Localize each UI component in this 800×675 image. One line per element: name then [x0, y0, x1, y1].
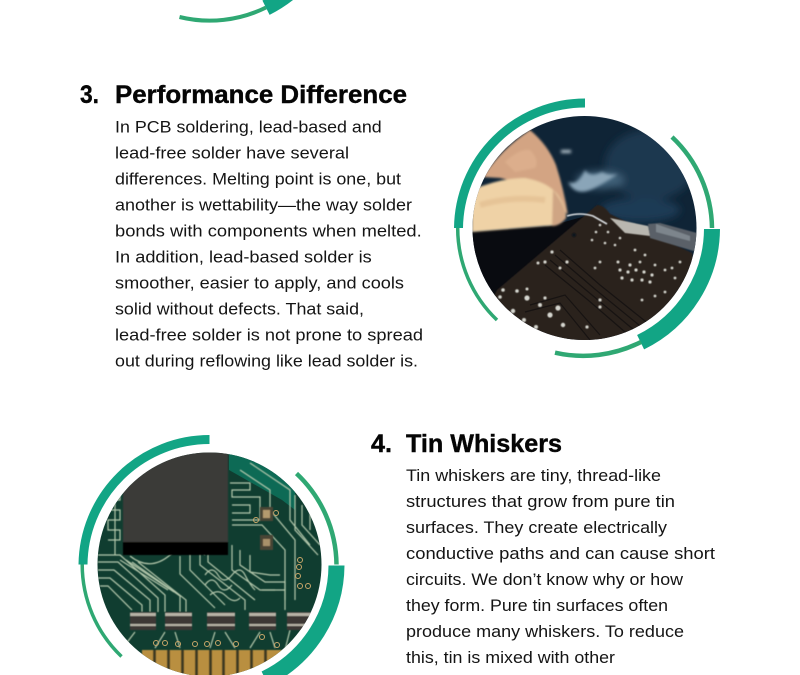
photo: hand soldering a circuit board [470, 115, 705, 345]
heading: 3. Performance Difference: Performance Difference [115, 81, 407, 109]
text block: performance difference: In PCB soldering, lead-based and [115, 118, 382, 136]
heading: 4. Tin Whiskers: Tin Whiskers [406, 430, 562, 458]
photo: circuit board with chip [95, 450, 325, 675]
text block: tin whiskers: Tin whiskers are tiny, thread-like [406, 466, 661, 485]
text block: tin whiskers: produce many whiskers. To reduce [406, 622, 684, 641]
ring around photo 3 [458, 103, 712, 356]
text block: tin whiskers: conductive paths and can cause short [406, 544, 715, 563]
text block: tin whiskers: circuits. We don’t know why or how [406, 570, 684, 589]
decorative ring from previous section [180, 0, 336, 21]
text block: performance difference: another is wettability—the way solder [115, 196, 412, 214]
ring around photo 4 [82, 440, 336, 675]
text block: performance difference: In addition, lead-based solder is [115, 248, 372, 266]
text block: performance difference: smoother, easier to apply, and cools [115, 274, 404, 292]
text block: performance difference: lead-free solder is not prone to spread [115, 326, 423, 344]
text block: tin whiskers [406, 466, 715, 667]
text block: tin whiskers: they form. Pure tin surfaces often [406, 596, 668, 615]
text block: performance difference: differences. Melting point is one, but [115, 170, 401, 188]
text block: performance difference: lead-free solder have several [115, 144, 349, 162]
text block: performance difference: solid without defects. That said, [115, 300, 364, 318]
text block: performance difference: bonds with components when melted. [115, 222, 422, 240]
text block: tin whiskers: this, tin is mixed with other [406, 648, 615, 667]
text block: tin whiskers: surfaces. They create electrically [406, 518, 668, 537]
heading: 3. Performance Difference: 3. [80, 81, 99, 109]
text block: tin whiskers: structures that grow from pure tin [406, 492, 675, 511]
heading: 4. Tin Whiskers: 4. [371, 430, 392, 458]
text block: performance difference [115, 118, 423, 370]
text block: performance difference: out during reflowing like lead solder is. [115, 352, 418, 370]
